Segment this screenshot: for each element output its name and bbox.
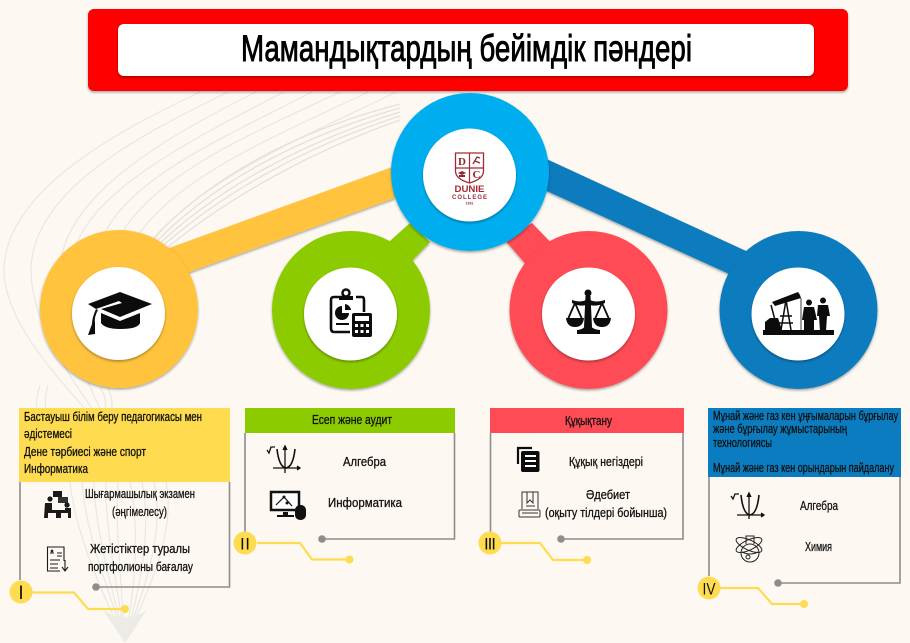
panel: accounting subjects xyxy=(234,408,455,564)
panel: oil and gas subjects: Химия xyxy=(805,539,832,554)
icon: algebra graph xyxy=(731,493,764,519)
panel header xyxy=(19,408,230,482)
node: law xyxy=(510,231,668,389)
panel: accounting subjects: Информатика xyxy=(328,495,403,510)
icon: graduation cap xyxy=(88,292,152,335)
icon: oil pump and workers xyxy=(763,292,834,335)
icon: algebra graph xyxy=(267,446,300,473)
icon: scales of justice xyxy=(566,290,611,334)
badge: I: I xyxy=(18,583,24,604)
badge: II: II xyxy=(240,534,250,554)
icon: documents xyxy=(518,448,540,472)
panel: law subjects xyxy=(478,408,684,564)
panel: education subjects: Жетістіктер туралы xyxy=(90,541,190,556)
panel header: әдістемесі xyxy=(24,427,72,441)
icon: computer and mouse xyxy=(271,492,306,520)
panel header xyxy=(708,408,901,477)
panel header xyxy=(245,408,455,433)
panel header: Есеп және аудит xyxy=(312,413,392,427)
panel: education subjects xyxy=(10,408,230,613)
panel: accounting subjects: Алгебра xyxy=(343,454,387,469)
panel header: Бастауыш білім беру педагогикасы мен xyxy=(24,410,202,424)
badge: IV xyxy=(698,576,808,608)
icon: college crest: DUNIE xyxy=(454,184,484,194)
connector: blue xyxy=(540,156,770,288)
badge: III: III xyxy=(484,534,496,554)
icon: college crest: 1991 xyxy=(466,202,473,206)
panel: education subjects: портфолионы бағалау xyxy=(88,559,193,574)
panel header: Дене тәрбиесі және спорт xyxy=(24,445,146,459)
connector: green xyxy=(380,223,430,268)
panel: law subjects: Әдебиет xyxy=(586,487,630,502)
panel: law subjects: Құқық негіздері xyxy=(569,454,643,469)
icon: college crest xyxy=(452,153,487,206)
connector: red xyxy=(505,223,560,275)
panel: law subjects: (оқыту тілдері бойынша) xyxy=(545,505,667,520)
node: accounting xyxy=(272,231,430,389)
panel header: және бұрғылау жұмыстарының xyxy=(713,422,847,436)
badge: IV: IV xyxy=(702,580,716,598)
connector: yellow xyxy=(150,166,395,279)
icon: college crest: C xyxy=(473,169,481,181)
node: education xyxy=(40,230,198,388)
icon: college crest: D xyxy=(458,156,466,168)
panel: oil and gas subjects xyxy=(698,408,901,608)
panel header: технологиясы xyxy=(713,436,772,450)
icon: college crest: COLLEGE xyxy=(452,195,487,201)
node: central college logo xyxy=(391,93,549,251)
icon: meeting xyxy=(44,491,71,518)
panel header: Құқықтану xyxy=(565,414,613,428)
panel header: Информатика xyxy=(24,462,88,476)
title banner xyxy=(88,9,848,91)
icon: book stack xyxy=(519,492,540,517)
icon: chemistry flask xyxy=(734,535,764,562)
panel: education subjects: (әңгімелесу) xyxy=(112,504,167,519)
panel header xyxy=(490,408,684,433)
badge: III xyxy=(478,532,591,564)
icon: portfolio document xyxy=(48,547,68,571)
node: oil and gas xyxy=(720,231,878,389)
panel: education subjects: Шығармашылық экзамен xyxy=(85,486,195,501)
icon: clipboard and calculator xyxy=(331,290,372,337)
title: Мамандықтардың бейімдік пәндері xyxy=(241,28,692,69)
badge: II xyxy=(234,532,354,564)
badge: I xyxy=(10,580,129,613)
panel: oil and gas subjects: Алгебра xyxy=(800,498,839,513)
